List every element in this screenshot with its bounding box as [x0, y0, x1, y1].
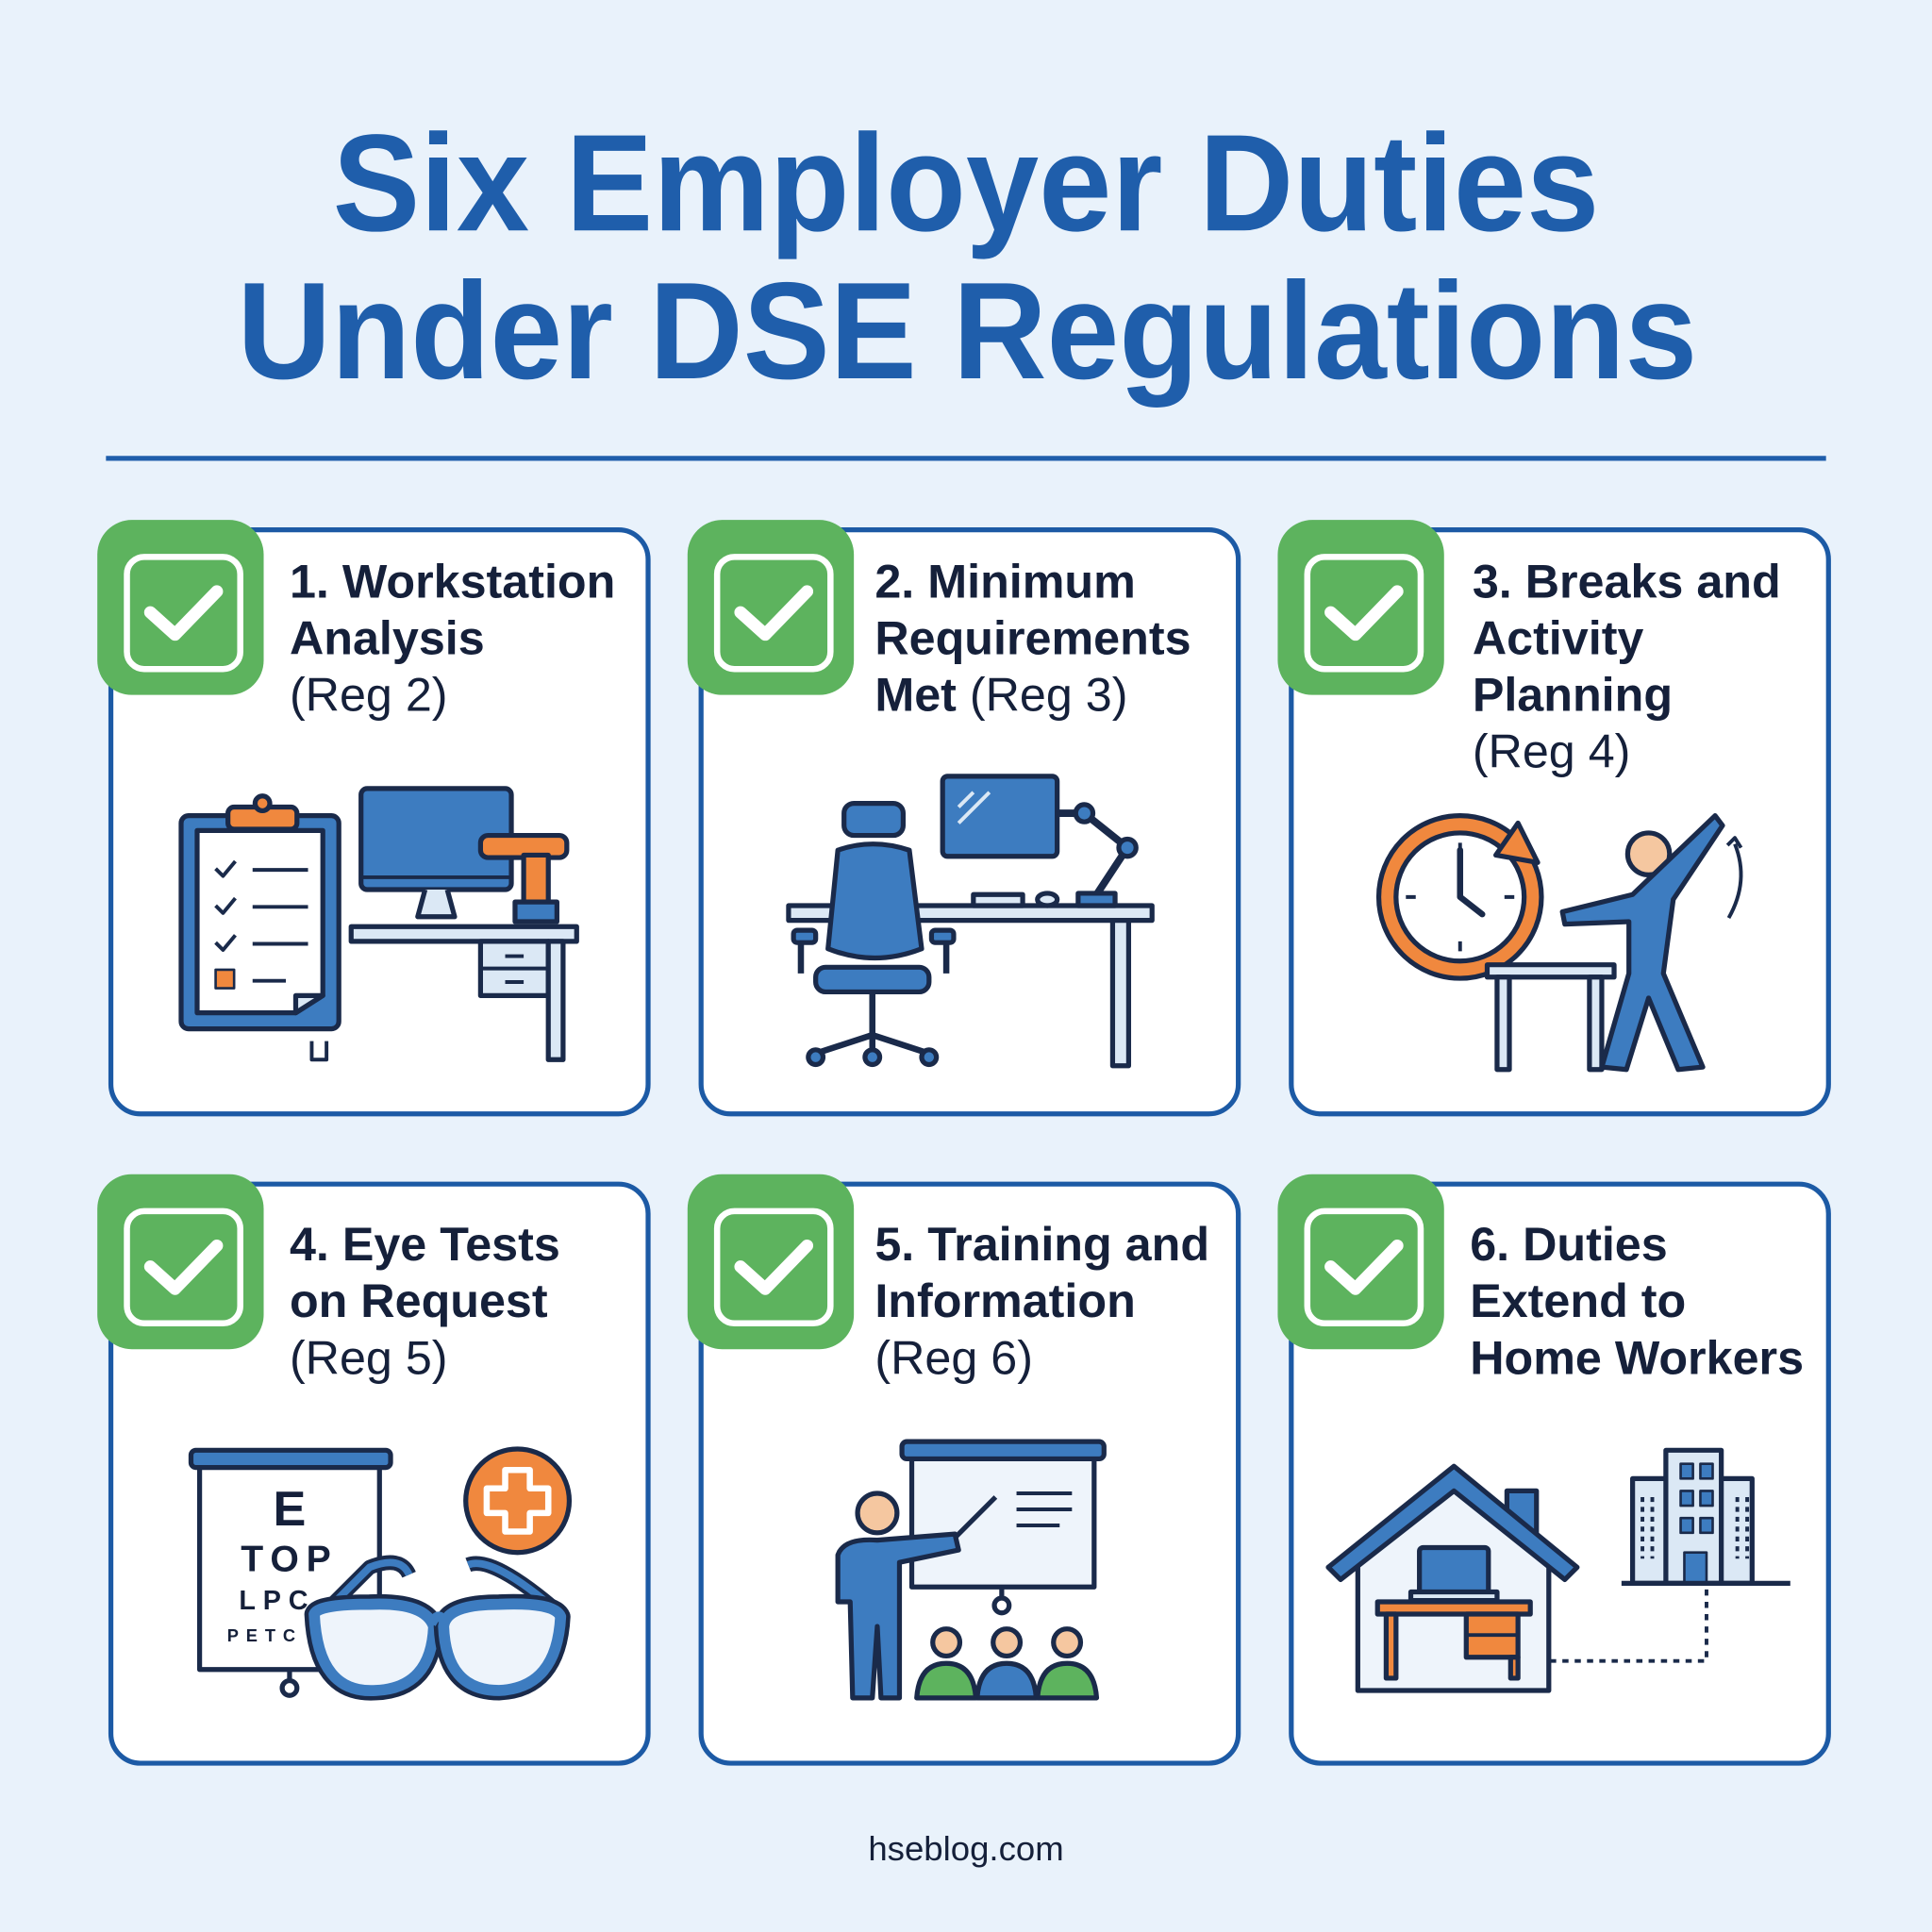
icon: chair and desk: [789, 776, 1152, 1066]
panel: eye tests: [97, 1174, 648, 1763]
icon: check badge: [688, 1174, 854, 1349]
heading: on Request: [290, 1274, 548, 1327]
panel: training: [688, 1174, 1239, 1763]
heading: (Reg 5): [290, 1330, 448, 1384]
heading: Home Workers: [1470, 1330, 1804, 1384]
heading: [290, 1217, 560, 1384]
icon: clipboard and desk: [181, 789, 576, 1059]
heading: 3. Breaks and: [1473, 554, 1781, 608]
heading: (Reg 4): [1473, 724, 1630, 778]
panel: minimum requirements: [688, 520, 1239, 1114]
icon: house and office: [1328, 1450, 1790, 1690]
heading: [874, 1217, 1209, 1384]
icon: eye chart and glasses: PETC: [227, 1625, 303, 1645]
title: Under DSE Regulations: [237, 254, 1697, 408]
title: Six Employer Duties: [333, 106, 1599, 259]
heading: 2. Minimum: [874, 554, 1136, 608]
icon: eye chart and glasses: E: [274, 1482, 306, 1537]
icon: check badge: [688, 520, 854, 695]
title: [237, 106, 1697, 408]
panel: breaks: [1277, 520, 1828, 1114]
icon: eye chart and glasses: [191, 1449, 569, 1695]
heading: [1473, 554, 1781, 778]
heading: Planning: [1473, 668, 1673, 722]
heading: 6. Duties: [1470, 1217, 1668, 1271]
panel: home workers: [1277, 1174, 1828, 1763]
heading: Extend to: [1470, 1274, 1686, 1327]
heading: 4. Eye Tests: [290, 1217, 560, 1271]
panel: workstation analysis: [97, 520, 648, 1114]
heading: Met (Reg 3): [874, 668, 1128, 722]
heading: Information: [874, 1274, 1136, 1327]
heading: [290, 554, 615, 722]
heading: 1. Workstation: [290, 554, 615, 608]
heading: Requirements: [874, 611, 1191, 665]
heading: [874, 554, 1191, 722]
icon: clock and stretching person: [1379, 816, 1741, 1070]
footer: hseblog.com: [868, 1829, 1064, 1868]
heading: [1470, 1217, 1804, 1384]
icon: check badge: [97, 1174, 264, 1349]
heading: Activity: [1473, 611, 1643, 665]
heading: (Reg 2): [290, 668, 448, 722]
icon: check badge: [1277, 520, 1444, 695]
icon: eye chart and glasses: TOP: [241, 1539, 339, 1579]
icon: presenter and audience: [838, 1441, 1104, 1698]
heading: Analysis: [290, 611, 485, 665]
icon: check badge: [1277, 1174, 1444, 1349]
heading: (Reg 6): [874, 1330, 1033, 1384]
icon: check badge: [97, 520, 264, 695]
icon: eye chart and glasses: LPC: [239, 1586, 315, 1616]
heading: 5. Training and: [874, 1217, 1209, 1271]
